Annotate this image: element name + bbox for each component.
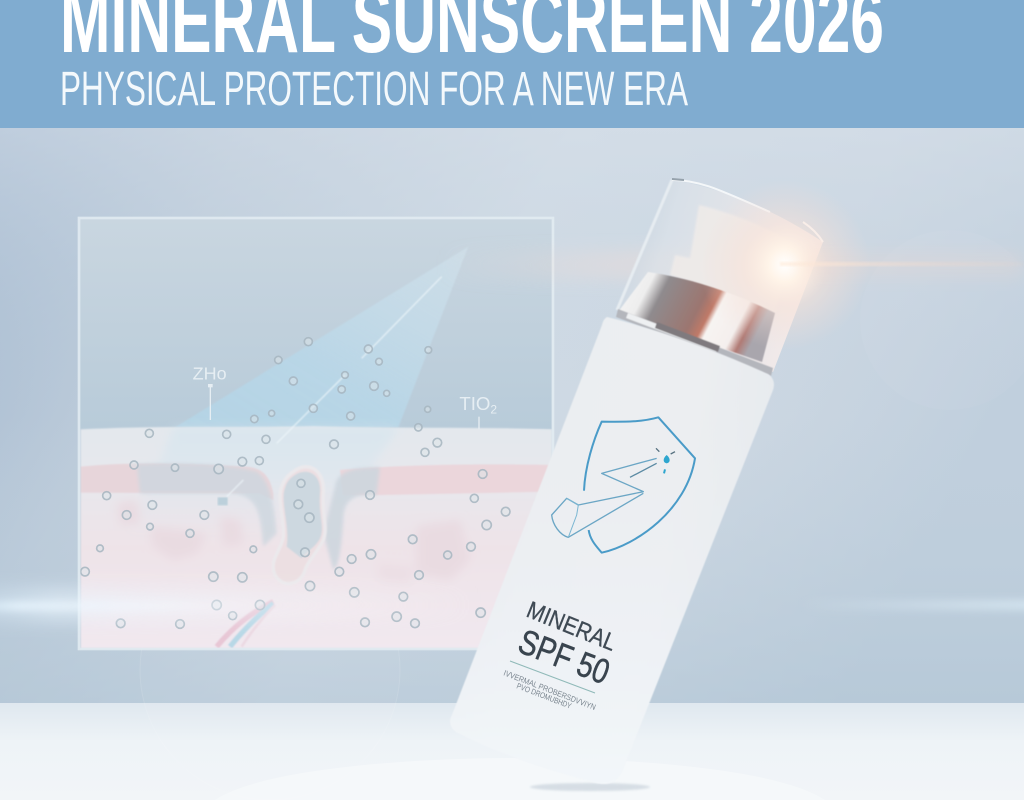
bottle label text: PVO DROMUBHDY <box>515 681 573 711</box>
beam centre line <box>227 277 442 497</box>
bottle label text <box>502 597 620 712</box>
panel frame <box>79 218 553 649</box>
mineral particles <box>81 338 510 628</box>
metal collar <box>616 272 775 376</box>
label: ZHo <box>193 363 227 420</box>
header banner <box>0 0 1024 128</box>
panel: skin cross-section diagram <box>79 218 553 649</box>
impact drop <box>664 455 670 463</box>
label: ZHo: ZHo <box>193 363 227 383</box>
beam outline <box>552 458 657 537</box>
icon: shield with UV beam <box>552 417 695 553</box>
bottle shadow <box>530 783 650 791</box>
bottle <box>450 179 823 791</box>
label: TiO2: 2 <box>490 402 497 416</box>
bottom blue light streak <box>0 588 1024 622</box>
pink dermis blobs <box>117 500 470 583</box>
bottle label text: SPF 50 <box>513 622 615 692</box>
hair follicle <box>273 467 325 584</box>
bottle label text: IVVERMAL PROBERSDVVIYN <box>502 668 597 712</box>
skin layers <box>81 426 552 648</box>
subtitle: PHYSICAL PROTECTION FOR A NEW ERA <box>60 63 688 116</box>
label: TiO2: TIO <box>459 393 490 414</box>
shield outline <box>584 417 695 553</box>
pump inside cap <box>670 205 795 312</box>
glass cap <box>617 179 823 372</box>
UV beam <box>175 247 468 427</box>
floor and platform <box>0 540 1024 800</box>
bottle body <box>450 317 774 784</box>
bottle label text: MINERAL <box>523 597 620 657</box>
blood vessel <box>217 602 275 647</box>
panel upper air area <box>80 219 552 429</box>
lens flare streak <box>440 250 780 280</box>
lens flare <box>700 180 1024 350</box>
beam end marker <box>218 497 228 505</box>
label: TiO2 <box>459 393 497 429</box>
